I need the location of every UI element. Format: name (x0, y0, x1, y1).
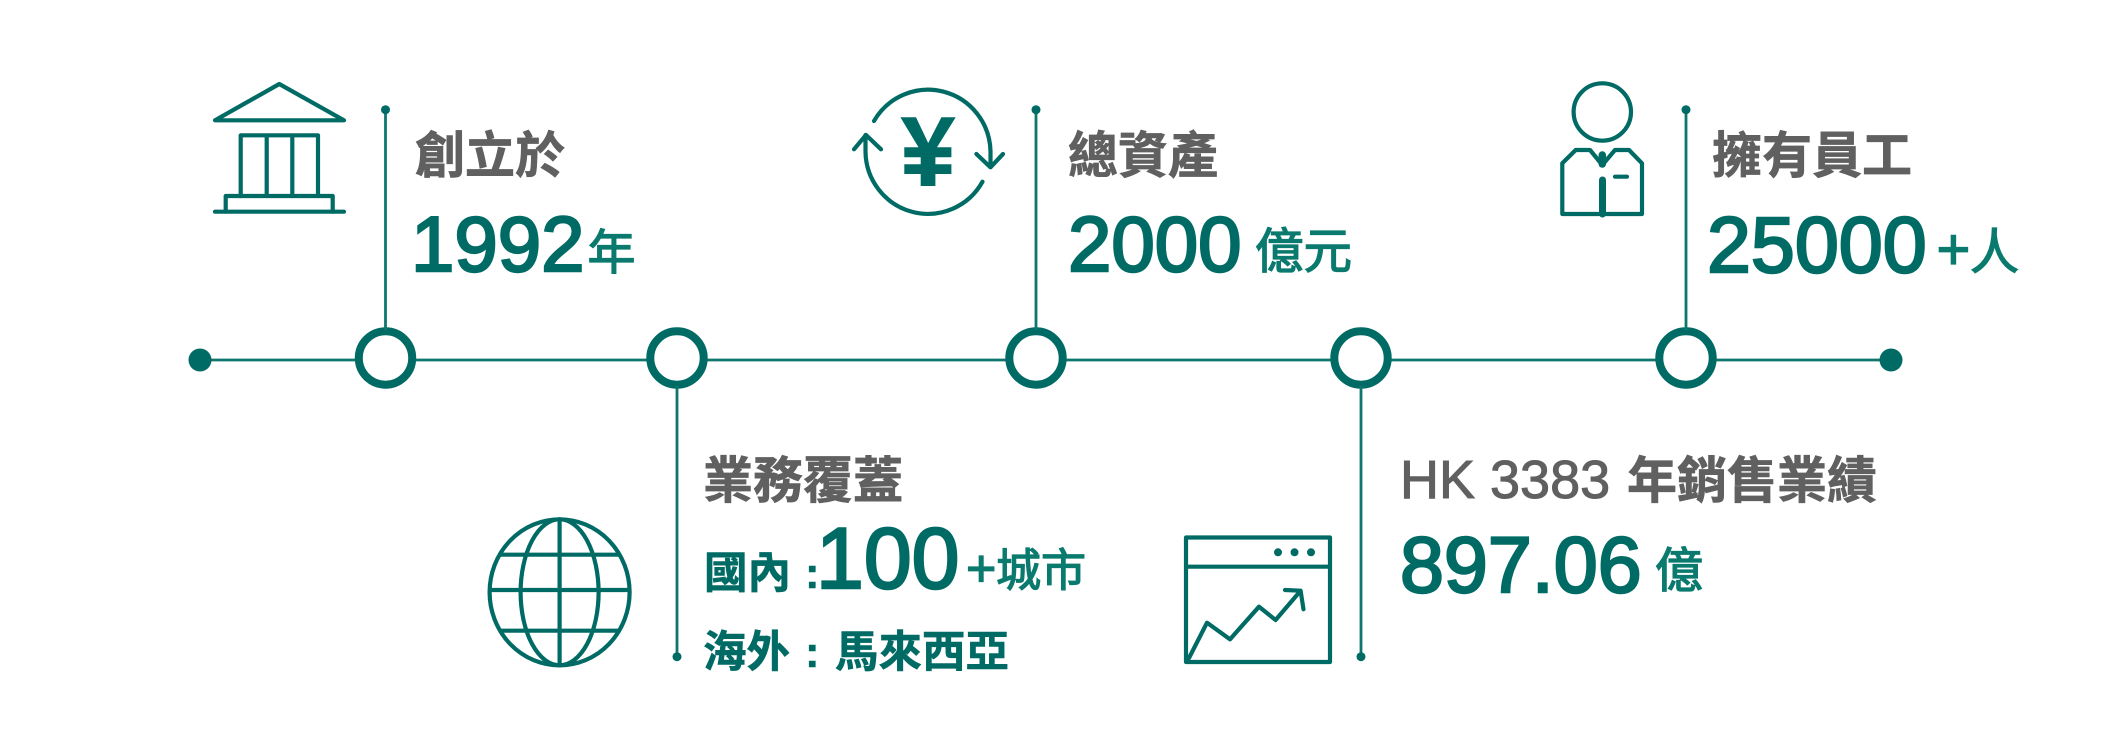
unit: 億 (1655, 545, 1703, 598)
heading: HK 3383 (1400, 450, 1610, 510)
panel: total assets (854, 90, 1352, 330)
panel: employees (1562, 83, 2019, 330)
panel: business coverage (490, 386, 1086, 677)
connector line (1356, 386, 1366, 661)
value: 1992 (411, 200, 585, 288)
connector line (1682, 105, 1690, 330)
domestic line: 100 (816, 511, 960, 607)
overseas line: 海外 (703, 629, 790, 677)
overseas line: : (805, 629, 820, 677)
heading: 擁有員工 (1712, 128, 1912, 184)
heading: 業務覆蓋 (703, 453, 903, 509)
panel: founded (215, 84, 636, 330)
domestic line: + (966, 540, 996, 598)
timeline axis with nodes (188, 331, 1902, 385)
domestic line: : (805, 550, 820, 598)
icon: yen with cycle arrows (854, 90, 1003, 214)
value: 2000 (1068, 200, 1242, 288)
value: 25000 (1707, 200, 1927, 289)
connector line (1032, 105, 1040, 330)
domestic line: 城市 (996, 545, 1086, 596)
heading: 創立於 (415, 128, 565, 184)
overseas line: 馬來西亞 (835, 629, 1009, 677)
unit label: 人 (1970, 226, 2019, 280)
icon: globe (490, 519, 630, 665)
unit: 億元 (1255, 225, 1352, 279)
domestic line: 國內 (704, 550, 791, 598)
value: 897.06 (1400, 520, 1642, 609)
heading: 總資產 (1068, 128, 1218, 184)
connector line (381, 105, 390, 330)
heading: 年銷售業績 (1627, 453, 1877, 509)
icon: bank building (215, 84, 344, 212)
connector line (672, 386, 682, 661)
panel: sales (1186, 386, 1877, 662)
icon: browser window with rising chart (1186, 538, 1330, 662)
icon: person in suit (1562, 83, 1642, 214)
unit: + (1936, 217, 1970, 282)
unit: 年 (588, 227, 636, 280)
